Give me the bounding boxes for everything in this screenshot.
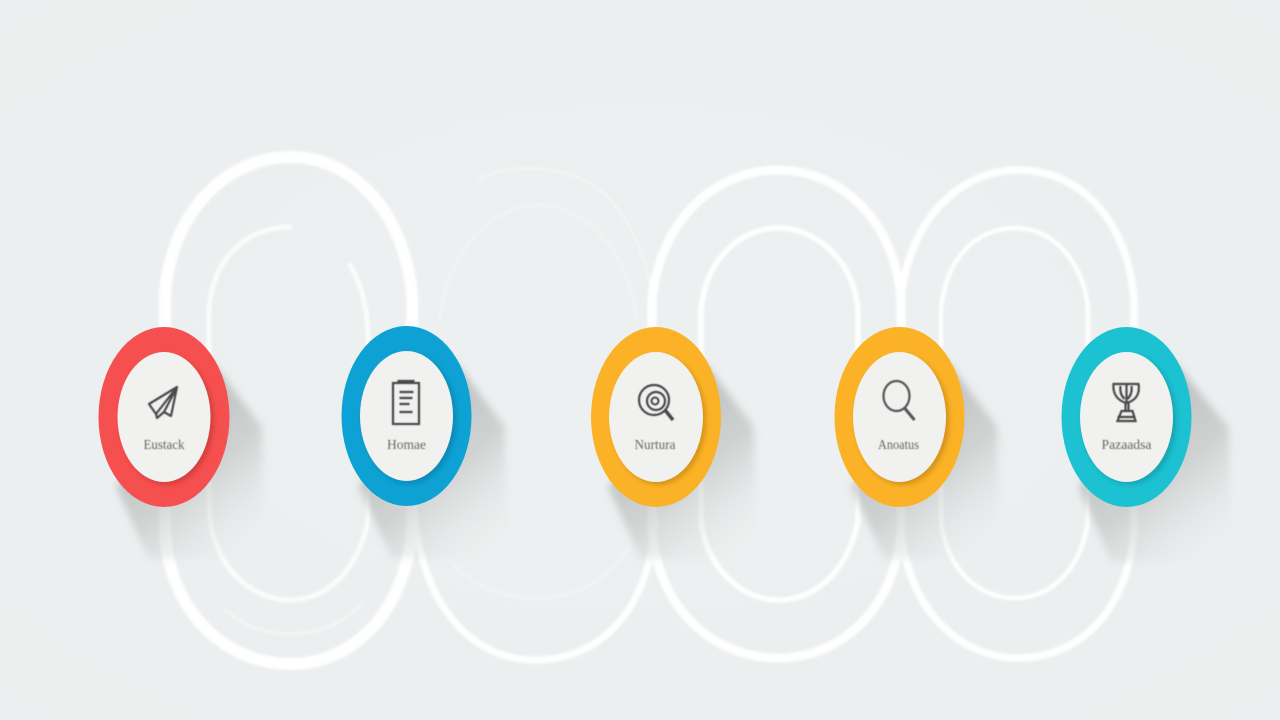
- icon: magnifier with coin: [639, 385, 673, 420]
- ring 4 inner: [941, 228, 1088, 598]
- white disc: [360, 351, 453, 481]
- icon: trophy: [1113, 384, 1139, 421]
- ring 2 outer: [415, 520, 655, 660]
- step 1: submit: [98, 327, 264, 559]
- label: Anoatus: [878, 438, 919, 453]
- long shadow: [1078, 362, 1232, 562]
- icon: paper plane: [149, 387, 177, 418]
- ring 3 inner: [701, 228, 858, 600]
- inner shadow: [856, 355, 950, 485]
- ring 4 outer: [901, 170, 1134, 658]
- step 5: results: [1062, 327, 1232, 562]
- inner shadow: [120, 355, 214, 485]
- white disc: [1080, 352, 1173, 482]
- label: Homae: [387, 438, 426, 453]
- white disc: [853, 352, 946, 482]
- label: Eustack: [144, 438, 184, 453]
- red ring: [98, 327, 230, 507]
- ring 1 faint third arc: [225, 605, 360, 634]
- white disc: [609, 352, 703, 482]
- label: Pazaadsa: [1102, 438, 1152, 453]
- white disc: [118, 352, 210, 482]
- step 3: measure: [591, 327, 756, 559]
- yellow ring: [834, 327, 964, 507]
- teal ring: [1062, 327, 1192, 507]
- long shadow: [608, 362, 756, 559]
- ring 3 outer: [652, 170, 901, 658]
- icon: clipboard: [393, 381, 419, 424]
- ring 2 inner faint: [440, 205, 636, 598]
- icon: magnifier: [884, 381, 914, 420]
- long shadow: [358, 361, 506, 558]
- long shadow: [852, 362, 1000, 559]
- ring 1 inner: [209, 227, 368, 600]
- blue ring: [342, 326, 472, 506]
- white loop rings: [165, 157, 1134, 664]
- yellow ring: [591, 327, 721, 507]
- step 2: review: [342, 326, 506, 558]
- inner shadow: [1082, 355, 1176, 485]
- step 4: analyse: [834, 327, 1000, 559]
- inner shadow: [362, 354, 456, 484]
- inner shadow: [612, 355, 706, 485]
- label: Nurtura: [634, 438, 676, 453]
- ring 1 outer: [165, 157, 412, 664]
- long shadow: [116, 362, 264, 559]
- ring 2 upper faint: [478, 168, 655, 320]
